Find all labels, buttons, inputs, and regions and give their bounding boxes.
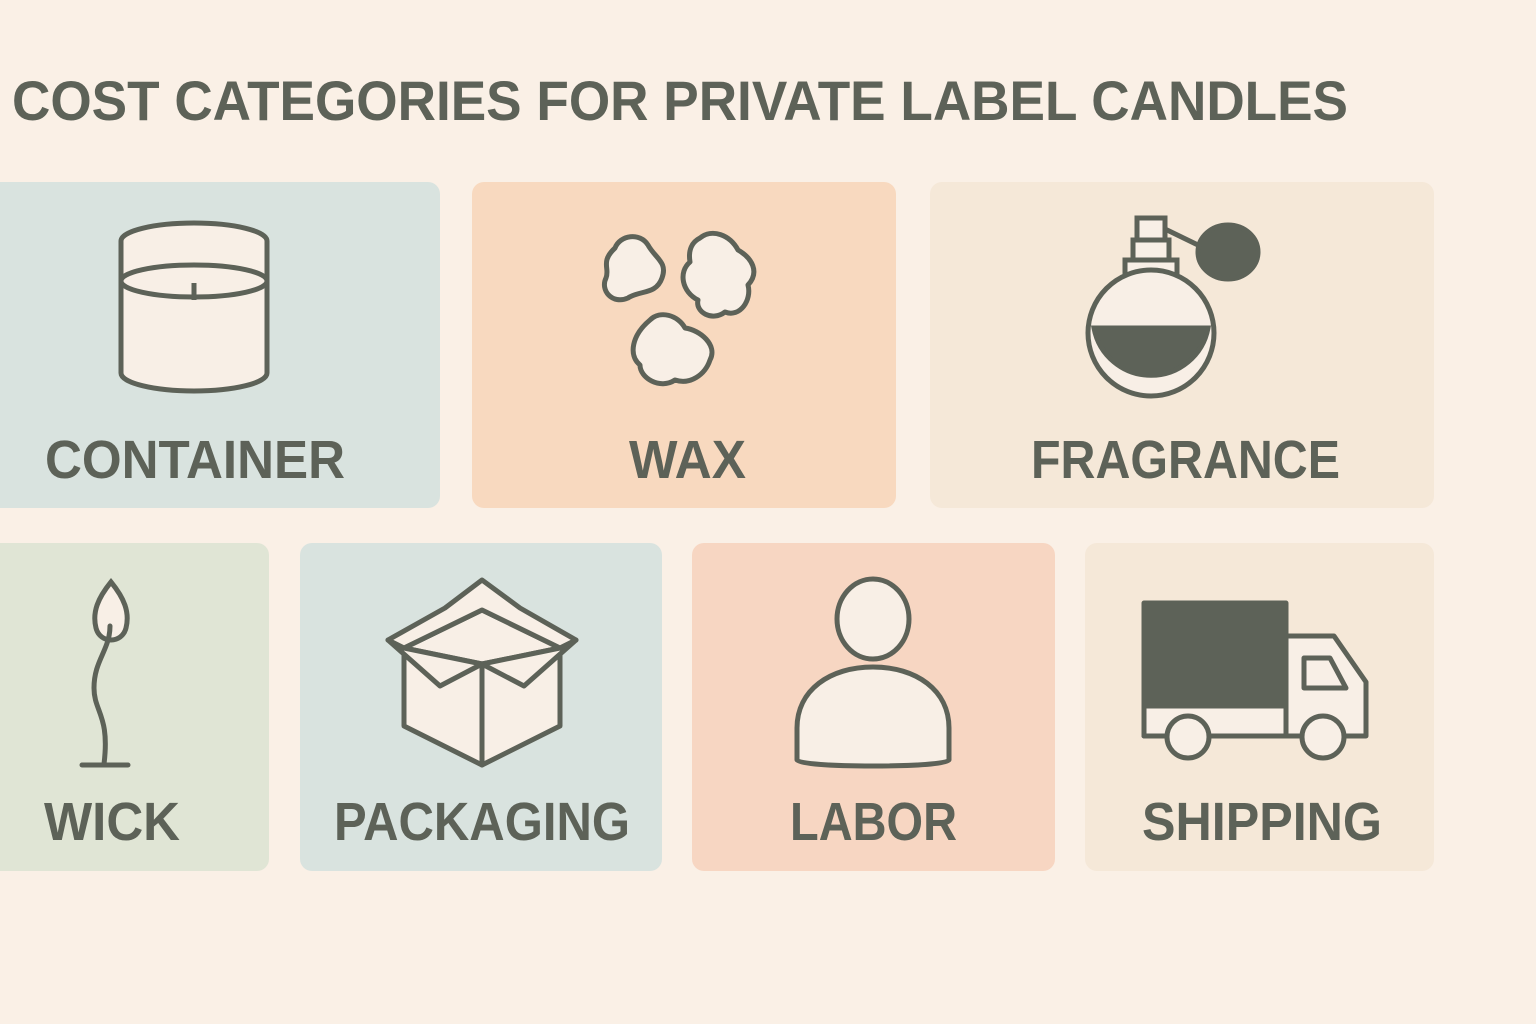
panel: container xyxy=(0,182,440,508)
icon: wax flakes xyxy=(604,233,754,384)
panel: wax xyxy=(472,182,896,508)
panel: fragrance xyxy=(930,182,1434,508)
icon: candle jar xyxy=(121,223,267,391)
label: fragrance: FRAGRANCE xyxy=(1031,430,1340,490)
label: labor: LABOR xyxy=(790,792,957,852)
label: wick: WICK xyxy=(44,792,180,852)
panel: packaging xyxy=(300,543,662,871)
icon: wick xyxy=(82,582,128,765)
title: COST CATEGORIES FOR PRIVATE LABEL CANDLES xyxy=(12,69,1348,132)
panel: wick xyxy=(0,543,269,871)
label: wax: WAX xyxy=(629,430,746,490)
icon: box xyxy=(388,580,576,765)
label: shipping: SHIPPING xyxy=(1142,792,1382,852)
label: container: CONTAINER xyxy=(45,430,345,490)
panel: shipping xyxy=(1085,543,1434,871)
icon: truck xyxy=(1144,603,1366,758)
icon: perfume bottle xyxy=(1088,218,1258,396)
panel: labor xyxy=(692,543,1055,871)
icon: person xyxy=(797,579,949,766)
label: packaging: PACKAGING xyxy=(334,792,630,852)
